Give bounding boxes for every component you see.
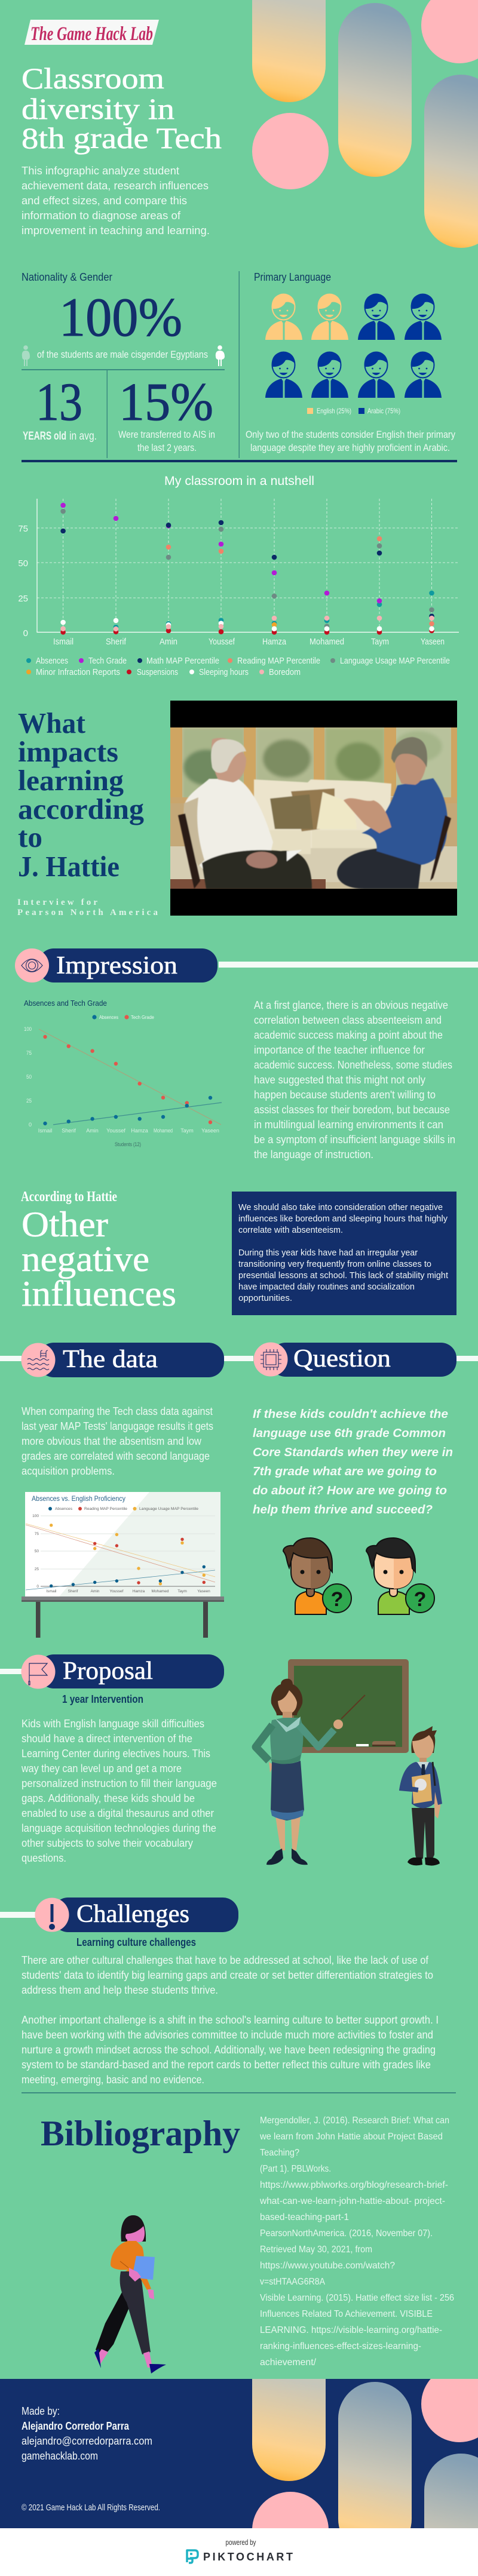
powered by label: powered by: [226, 2538, 256, 2547]
x axis labels: [53, 637, 445, 647]
challenges paragraph: meeting, emerging, basic and no evidence.: [22, 2074, 204, 2086]
icon: eye: [22, 959, 42, 972]
tech grade points: [43, 1035, 212, 1124]
interview caption: Interview for: [17, 898, 97, 907]
bibliography list: https://www.youtube.com/watch?: [260, 2261, 395, 2271]
heading: other negative influences: [21, 1189, 176, 1313]
panel: hattie note: influences like boredom and sleeping hours that highly: [238, 1214, 448, 1224]
heading: nationality and gender: Nationality & Gender: [22, 271, 112, 283]
challenges paragraph: students' data to identify big learning gaps and create or set better differentiation strategies to: [22, 1969, 433, 1981]
bibliography list: ranking-influences-effect-sizes-learning-: [260, 2341, 421, 2351]
trend lines: [39, 1029, 222, 1125]
stat: 15% transferred: Were transferred to AIS in: [118, 429, 215, 440]
absences points: [43, 1096, 212, 1125]
legend: languages: Arabic (75%): [367, 407, 400, 415]
bibliography list: v=stHTAAG6R8A: [260, 2277, 325, 2287]
chart legend: Suspensions: [137, 667, 178, 677]
challenges paragraph: [22, 1954, 439, 2086]
bibliography list: (Part 1). PBLWorks.: [260, 2164, 331, 2174]
bibliography list: Retrieved May 30, 2021, from: [260, 2245, 372, 2255]
section header: question: Question: [293, 1345, 391, 1373]
intro paragraph: [22, 165, 210, 237]
panel: hattie note: presential lessons at school. This lack of stability might: [238, 1270, 449, 1281]
board chart axis labels: Taym: [177, 1589, 187, 1594]
chart board: absences vs english proficiency: [22, 1492, 224, 1638]
axis labels: Sherif: [62, 1128, 76, 1134]
subheading: learning culture challenges: Learning culture challenges: [76, 1936, 196, 1948]
subheading: 1 year intervention: 1 year Intervention: [62, 1693, 143, 1705]
y axis labels: 0: [23, 628, 28, 638]
bibliography list: Teaching?: [260, 2148, 299, 2158]
series: language usage MAP percentile: [60, 509, 434, 629]
challenges paragraph: system to be standard-based and the report cards to better reflect this culture with grades like: [22, 2059, 431, 2071]
heading: what impacts learning according to J. Hattie: impacts: [18, 735, 118, 768]
board chart legend: Language Usage MAP Percentile: [139, 1507, 198, 1511]
logo: The Game Hack Lab: The Game Hack Lab: [30, 23, 153, 45]
intro paragraph: and effect sizes, and compare this: [22, 195, 187, 207]
board chart axis labels: Hamza: [133, 1589, 145, 1594]
stat: 13 years: in avg.: [69, 430, 97, 443]
series: tech grade: [60, 503, 382, 603]
data paragraph: more obvious that the absentism and low: [22, 1435, 202, 1447]
y axis labels: [18, 524, 28, 638]
bibliography list: Mergendoller, J. (2016). Research Brief: What can: [260, 2116, 449, 2126]
series: boredom: [60, 616, 434, 631]
x axis labels: Ismail: [53, 637, 73, 647]
chart: absences and tech grade: [24, 999, 222, 1147]
credits: [22, 2405, 152, 2462]
logo: The Game Hack Lab: [24, 20, 159, 45]
bibliography list: Influences Related To Achievement. VISIBLE: [260, 2309, 433, 2319]
intro paragraph: achievement data, research influences: [22, 180, 209, 192]
icon: student with question mark, green: ?: [414, 1588, 426, 1611]
section header: question: [253, 1343, 456, 1377]
heading: my classroom in a nutshell: My classroom in a nutshell: [164, 474, 314, 488]
section header: proposal: [0, 1654, 224, 1689]
section header: challenges: [0, 1898, 238, 1932]
board chart legend: [48, 1507, 198, 1511]
section header: proposal: Proposal: [63, 1657, 153, 1685]
credits: alejandro@corredorparra.com: [22, 2435, 152, 2447]
logo: piktochart: PIKTOCHART: [203, 2551, 293, 2563]
illustration: chalkboard: [288, 1659, 409, 1753]
connector line: data and question: [0, 1356, 478, 1361]
pictogram: students by language: [265, 294, 442, 398]
stat: 13 years: YEARS old: [23, 430, 66, 443]
impression paragraph: At a first glance, there is an obvious negative: [254, 999, 448, 1011]
question text: 7th grade what are we going to: [253, 1465, 437, 1478]
section header: the data: The data: [63, 1346, 158, 1373]
board chart axis labels: 0: [36, 1585, 39, 1589]
title: 8th grade Tech: [22, 121, 222, 155]
left man: [178, 738, 312, 889]
data paragraph: When comparing the Tech class data against: [22, 1405, 213, 1417]
heading: what impacts learning according to J. Hattie: What: [18, 707, 86, 739]
board chart axis labels: 100: [32, 1514, 39, 1518]
stat caption: of the students are male cisgender Egyptians: [37, 349, 208, 360]
panel: primary language: [246, 271, 455, 453]
proposal paragraph: should have a direct intervention of the: [22, 1733, 192, 1745]
interview caption: [17, 898, 158, 917]
intro paragraph: information to diagnose areas of: [22, 210, 181, 222]
heading: primary language: Primary Language: [254, 271, 331, 283]
challenges paragraph: have been working with the advisories committee to include much more activities to foster and: [22, 2029, 433, 2041]
chart legend: [26, 656, 450, 677]
question text: [253, 1408, 453, 1516]
section header: impression: Impression: [56, 952, 177, 980]
data paragraph: acquisition problems.: [22, 1465, 115, 1477]
proposal paragraph: other subjects to solve their vocabulary: [22, 1837, 193, 1849]
chart legend: Boredom: [269, 667, 301, 677]
axis labels: 50: [26, 1074, 32, 1080]
panel: hattie note: transitioning very frequently from online classes to: [238, 1259, 431, 1269]
axis labels: Mohamed: [154, 1128, 173, 1134]
heading: what impacts learning according to J. Hattie: learning: [18, 764, 124, 797]
board chart axis labels: Amin: [91, 1589, 100, 1594]
icon: student with question mark, green: [366, 1538, 434, 1614]
board chart axis labels: 50: [35, 1549, 39, 1553]
impression paragraph: importance of the teacher influence for: [254, 1044, 425, 1056]
decorative header shapes: [252, 0, 478, 248]
legend: [92, 1014, 154, 1020]
chart legend: Tech Grade: [88, 656, 127, 666]
credits: Alejandro Corredor Parra: [22, 2420, 130, 2432]
series: sleeping hours: [60, 618, 434, 631]
video still: interview: [170, 701, 457, 916]
board chart axis labels: Sherif: [68, 1589, 78, 1594]
proposal paragraph: personalized instruction to fill their language: [22, 1777, 217, 1789]
series: reading MAP percentile: [166, 536, 434, 627]
stat: 13 years: 13: [36, 373, 82, 432]
challenges paragraph: address them and help these students thrive.: [22, 1984, 218, 1996]
proposal paragraph: [21, 1718, 217, 1864]
question text: language use 6th grade Common: [253, 1427, 446, 1440]
x axis labels: Taym: [371, 637, 389, 647]
x axis labels: Youssef: [209, 637, 235, 647]
section header: impression: [15, 948, 478, 982]
panel: hattie note: [232, 1192, 456, 1315]
footer panel: [0, 2379, 478, 2528]
proposal paragraph: enabled to use a digital thesaurus and other: [22, 1807, 214, 1819]
heading: what impacts learning according to J. Hattie: [18, 707, 144, 883]
legend: Absences: [99, 1014, 118, 1020]
board chart axis labels: 25: [35, 1567, 39, 1571]
proposal paragraph: gaps. Additionally, these kids should be: [22, 1792, 195, 1804]
question text: Core Standards when they were in: [253, 1446, 453, 1459]
axis labels: 25: [26, 1098, 32, 1104]
panel: hattie note: opportunities.: [238, 1293, 292, 1303]
heading: other negative influences: According to Hattie: [21, 1189, 117, 1205]
chart: absences and tech grade: Absences and Tech Grade: [24, 999, 107, 1008]
impression paragraph: in multilingual learning environments it can: [254, 1119, 443, 1131]
series: absences: [114, 591, 434, 630]
axis labels: Yaseen: [201, 1128, 219, 1134]
question text: help them thrive and succeed?: [253, 1503, 433, 1516]
impression paragraph: assist classes for their boredom, but because: [254, 1104, 450, 1116]
question text: do about it? How are we going to: [253, 1484, 447, 1497]
right man: [337, 737, 451, 889]
impression paragraph: the language of instruction.: [254, 1149, 373, 1160]
chart: classroom dot plot: [18, 499, 459, 677]
proposal paragraph: language acquisition technologies during the: [22, 1822, 216, 1834]
legend: languages: [307, 407, 400, 415]
heading: other negative influences: Other: [22, 1205, 108, 1244]
proposal paragraph: way they can level up and get a more: [21, 1763, 182, 1774]
section header: the data: [22, 1343, 224, 1377]
copyright: © 2021 Game Hack Lab All Rights Reserved.: [22, 2503, 160, 2513]
axis labels: Amin: [86, 1128, 99, 1134]
proposal paragraph: Learning Center during electives hours. This: [22, 1748, 210, 1760]
heading: what impacts learning according to J. Hattie: J. Hattie: [18, 850, 120, 883]
decorative footer shapes: [252, 2379, 478, 2528]
heading: other negative influences: negative: [22, 1239, 149, 1279]
icon: student with question mark, brown: ?: [331, 1588, 343, 1611]
board chart axis labels: Youssef: [110, 1589, 124, 1594]
impression paragraph: happen because students aren't willing to: [254, 1089, 436, 1101]
title: diversity in: [22, 92, 174, 125]
language caption: [246, 429, 455, 453]
heading: bibliography: Bibliography: [41, 2114, 240, 2153]
panel: hattie note: correlate with absenteeism.: [238, 1225, 343, 1235]
bibliography list: achievement/: [260, 2357, 317, 2368]
x axis labels: Hamza: [262, 637, 287, 647]
white footer strip: [0, 2528, 478, 2576]
intro paragraph: improvement in teaching and learning.: [22, 225, 210, 237]
y axis labels: 25: [18, 594, 28, 604]
board chart legend: Reading MAP Percentile: [84, 1507, 127, 1511]
x axis labels: Mohamed: [310, 637, 344, 647]
title: [22, 62, 222, 155]
series: math MAP percentile: [60, 520, 434, 619]
data paragraph: grades are correlated with second language: [22, 1450, 210, 1462]
bibliography list: LEARNING. https://visible-learning.org/hattie-: [260, 2325, 442, 2335]
impression paragraph: correlation between class absenteeism and: [254, 1014, 442, 1026]
board chart title: Absences vs. English Proficiency: [32, 1494, 125, 1503]
axis labels: Taym: [180, 1128, 194, 1134]
bibliography list: based-teaching-part-1: [260, 2212, 349, 2222]
axis labels: [24, 1026, 219, 1134]
chart legend: Language Usage MAP Percentile: [340, 656, 450, 666]
icon: chip: [261, 1349, 281, 1370]
panel: hattie note: have impacted daily routines and socialization: [238, 1282, 415, 1292]
chart legend: Absences: [36, 656, 68, 666]
stat: 15% transferred: the last 2 years.: [137, 442, 197, 453]
icon: grey person: [22, 345, 30, 366]
stat: 15% transferred: 15%: [119, 373, 213, 432]
axis labels: Youssef: [106, 1128, 125, 1134]
challenges paragraph: There are other cultural challenges that have to be addressed at school, like the lack of use of: [22, 1954, 429, 1966]
heading: what impacts learning according to J. Hattie: to: [18, 821, 42, 853]
board chart axis labels: Mohamed: [152, 1589, 169, 1594]
section header: challenges: Challenges: [76, 1900, 189, 1928]
series: minor infraction reports: [272, 622, 277, 627]
chart legend: Math MAP Percentile: [146, 656, 219, 666]
board chart axis labels: Yaseen: [197, 1589, 210, 1594]
axis labels: Ismail: [38, 1128, 52, 1134]
board chart points: [50, 1524, 206, 1588]
board chart axis labels: [32, 1514, 210, 1594]
credits: gamehacklab.com: [22, 2450, 98, 2462]
proposal paragraph: Kids with English language skill difficulties: [22, 1718, 204, 1730]
illustration: student: [399, 1726, 442, 1866]
stat: 13 years: [23, 373, 97, 443]
data paragraph: [22, 1405, 213, 1477]
stat: 100%: 100%: [59, 287, 182, 348]
bibliography list: what-can-we-learn-john-hattie-about- project-: [259, 2196, 445, 2206]
heading: other negative influences: influences: [22, 1274, 176, 1313]
chart: absences and tech grade: Students (12): [115, 1141, 141, 1147]
impression paragraph: be a symptom of insufficient language skills in: [254, 1134, 455, 1146]
board chart axis labels: Ismail: [47, 1589, 57, 1594]
y axis labels: 50: [18, 558, 28, 569]
axis labels: 0: [29, 1122, 32, 1128]
intro paragraph: This infographic analyze student: [22, 165, 179, 177]
sofa: [254, 779, 391, 854]
interview caption: Pearson North America: [17, 908, 158, 917]
illustration: walking woman with tablet: [94, 2215, 166, 2374]
icon: student with question mark, brown: [283, 1538, 351, 1614]
chart legend: Reading MAP Percentile: [237, 656, 320, 666]
bibliography list: we learn from John Hattie about Project Based: [259, 2132, 443, 2142]
axis labels: 75: [26, 1050, 32, 1056]
title: Classroom: [22, 62, 164, 95]
panel: hattie note: During this year kids have had an irregular year: [238, 1248, 418, 1258]
icon: pool: [27, 1350, 49, 1370]
data paragraph: last year MAP Tests' langugage results it gets: [22, 1420, 213, 1432]
x axis labels: Sherif: [106, 637, 127, 647]
bibliography list: PearsonNorthAmerica. (2016, November 07).: [260, 2228, 433, 2239]
axis labels: Hamza: [131, 1128, 148, 1134]
y axis labels: 75: [18, 524, 28, 534]
panel: hattie note: We should also take into consideration other negative: [238, 1202, 443, 1212]
icon: exclamation mark: [49, 1904, 55, 1930]
impression paragraph: academic success. Nonetheless, some studies: [254, 1059, 452, 1071]
panel: nationality and gender: [22, 271, 225, 453]
legend: Tech Grade: [131, 1014, 154, 1020]
heading: what impacts learning according to J. Hattie: according: [18, 793, 144, 825]
impression paragraph: [254, 999, 455, 1160]
chart legend: Sleeping hours: [199, 667, 249, 677]
chart legend: Minor Infraction Reports: [36, 667, 120, 677]
series: suspensions: [60, 628, 434, 635]
legend: languages: English (25%): [317, 407, 351, 415]
board chart trend lines: [26, 1524, 215, 1590]
board chart legend: Absences: [55, 1507, 73, 1511]
challenges paragraph: nurture a growth mindset across the school. Additionally, we have been redesigning the grading: [22, 2044, 436, 2056]
impression paragraph: academic success making a point about the: [254, 1029, 443, 1041]
illustration: teacher: [256, 1679, 365, 1865]
question text: If these kids couldn't achieve the: [253, 1408, 448, 1421]
challenges paragraph: Another important challenge is a shift in the school's learning culture to better support growth. I: [22, 2014, 439, 2026]
impression paragraph: have suggested that this might not only: [254, 1074, 425, 1086]
bibliography list: [259, 2116, 454, 2368]
bibliography list: https://www.pblworks.org/blog/research-brief-: [260, 2180, 448, 2190]
credits: Made by:: [22, 2405, 60, 2417]
proposal paragraph: questions.: [22, 1852, 66, 1864]
x axis labels: Amin: [160, 637, 177, 647]
axis labels: 100: [24, 1026, 32, 1032]
icon: flag: [29, 1663, 47, 1685]
x axis labels: Yaseen: [421, 637, 445, 647]
icon: white person: [216, 345, 225, 366]
bibliography list: Visible Learning. (2015). Hattie effect size list - 256: [260, 2293, 454, 2303]
board chart axis labels: 75: [35, 1532, 39, 1536]
